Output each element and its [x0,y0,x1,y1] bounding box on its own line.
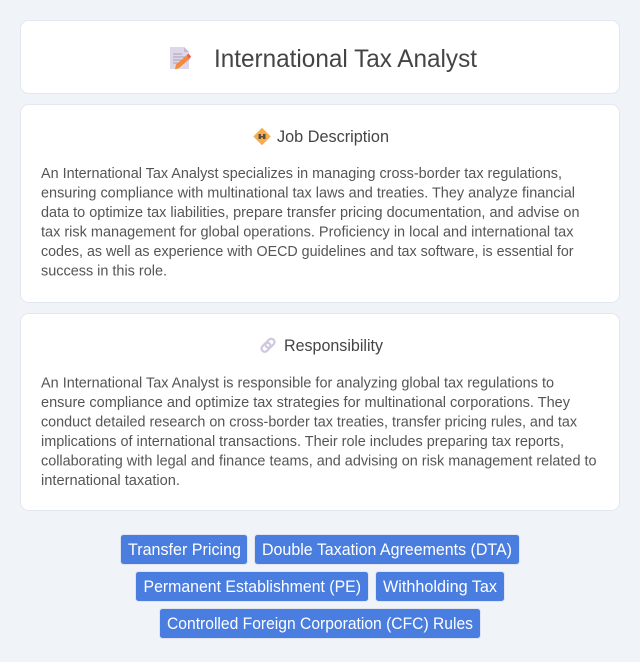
text block: job description: ensuring compliance with multinational tax laws and treaties. They analyze financial [41,186,575,202]
panel: job description [20,104,620,302]
text block: job description: An International Tax Analyst specializes in managing cross-border tax regulations, [41,166,562,182]
tag: Withholding Tax [376,572,504,602]
tag: Withholding Tax: Withholding Tax [383,577,498,596]
text block: job description: success in this role. [41,264,167,280]
icon: document with pencil [170,47,191,70]
tag: Permanent Establishment [136,572,368,602]
heading: title text: International Tax Analyst [214,46,477,73]
tag: Double Taxation Agreements: Double Taxation Agreements (DTA) [262,540,512,559]
text block: job description: data to optimize tax liabilities, prepare transfer pricing documentation, and advise on [41,205,580,221]
tag: Transfer Pricing: Transfer Pricing [128,540,241,559]
text block: responsibility: An International Tax Analyst is responsible for analyzing global tax regulations to [41,376,554,392]
text block: responsibility: ensure compliance and optimize tax strategies for multinational corporations. They [41,395,571,411]
icon: chain link [260,337,276,353]
panel: title [20,20,620,94]
text block: responsibility: international taxation. [41,473,180,489]
tag: Controlled Foreign Corporation Rules: Controlled Foreign Corporation (CFC) Rules [167,614,473,633]
icon: orange diamond [254,128,270,144]
tag: Transfer Pricing [120,534,248,564]
tag: Controlled Foreign Corporation Rules [160,608,480,638]
tag: Double Taxation Agreements [254,534,520,564]
text block: responsibility: collaborating with legal and finance teams, and advising on risk management related to [41,454,596,470]
text block: job description: tax risk management for global operations. Proficiency in local and international tax [41,224,574,240]
text block: responsibility [41,376,596,489]
tag: Permanent Establishment: Permanent Establishment (PE) [144,577,361,596]
heading: job description: Job Description [277,127,389,146]
heading: responsibility: Responsibility [284,336,384,355]
text block: responsibility: conduct detailed research on cross-border tax treaties, transfer pricing rules, and tax [41,414,578,430]
panel: responsibility [20,314,620,510]
text block: responsibility: implications of international transactions. Their role includes preparing tax reports, [41,434,564,450]
text block: job description [41,166,580,280]
text block: job description: codes, as well as experience with OECD guidelines and tax software, is essential for [41,244,574,260]
